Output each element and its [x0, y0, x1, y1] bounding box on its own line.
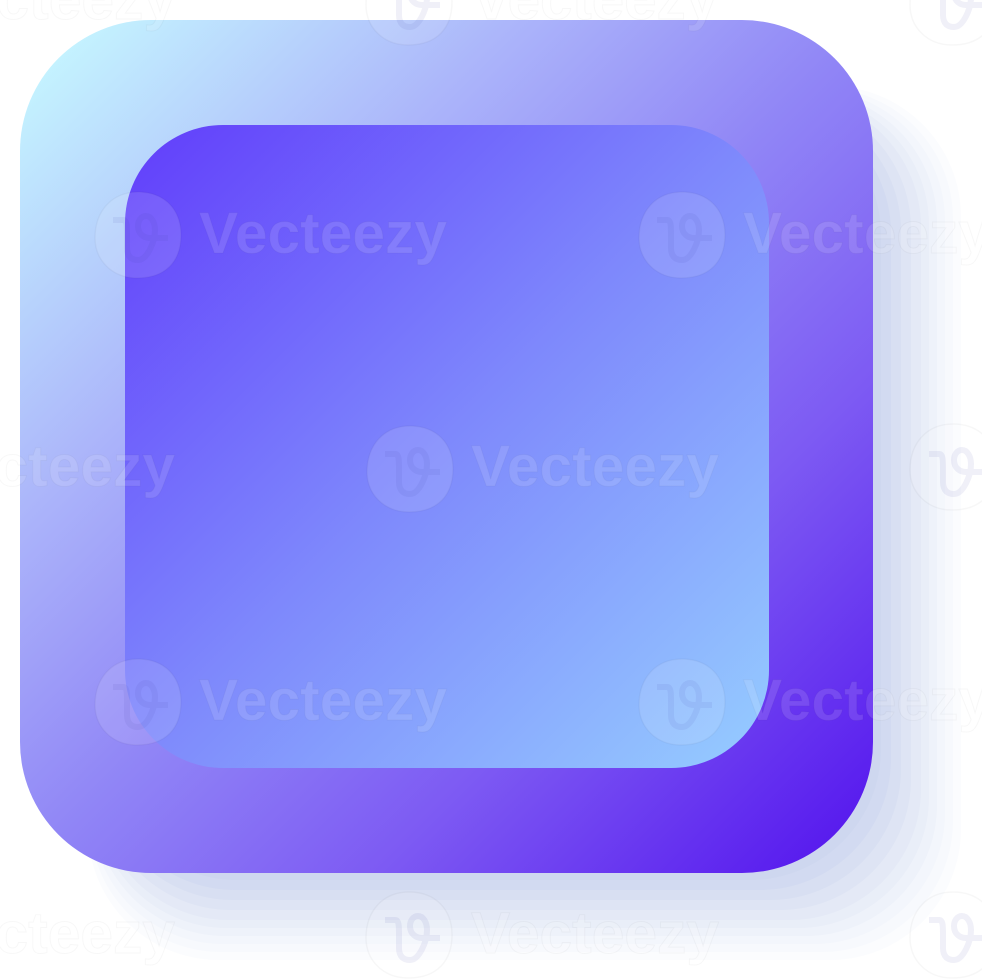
watermark: lower row — [95, 659, 982, 745]
watermark: upper row: Vecteezy — [743, 201, 982, 266]
watermark: lower row: Vecteezy — [199, 668, 447, 733]
watermark: middle row — [0, 424, 982, 512]
watermark: lower row: Vecteezy — [743, 668, 982, 733]
watermark: upper row: Vecteezy — [199, 201, 447, 266]
watermark: upper row — [95, 192, 982, 278]
watermark: bottom row: Vecteezy — [471, 901, 719, 966]
outer rounded square — [20, 20, 873, 873]
watermark: bottom row — [0, 892, 982, 978]
watermark: top row — [0, 0, 982, 45]
drop shadow — [88, 86, 961, 960]
watermark: middle row: Vecteezy — [471, 434, 719, 499]
inner rounded square — [125, 125, 769, 768]
